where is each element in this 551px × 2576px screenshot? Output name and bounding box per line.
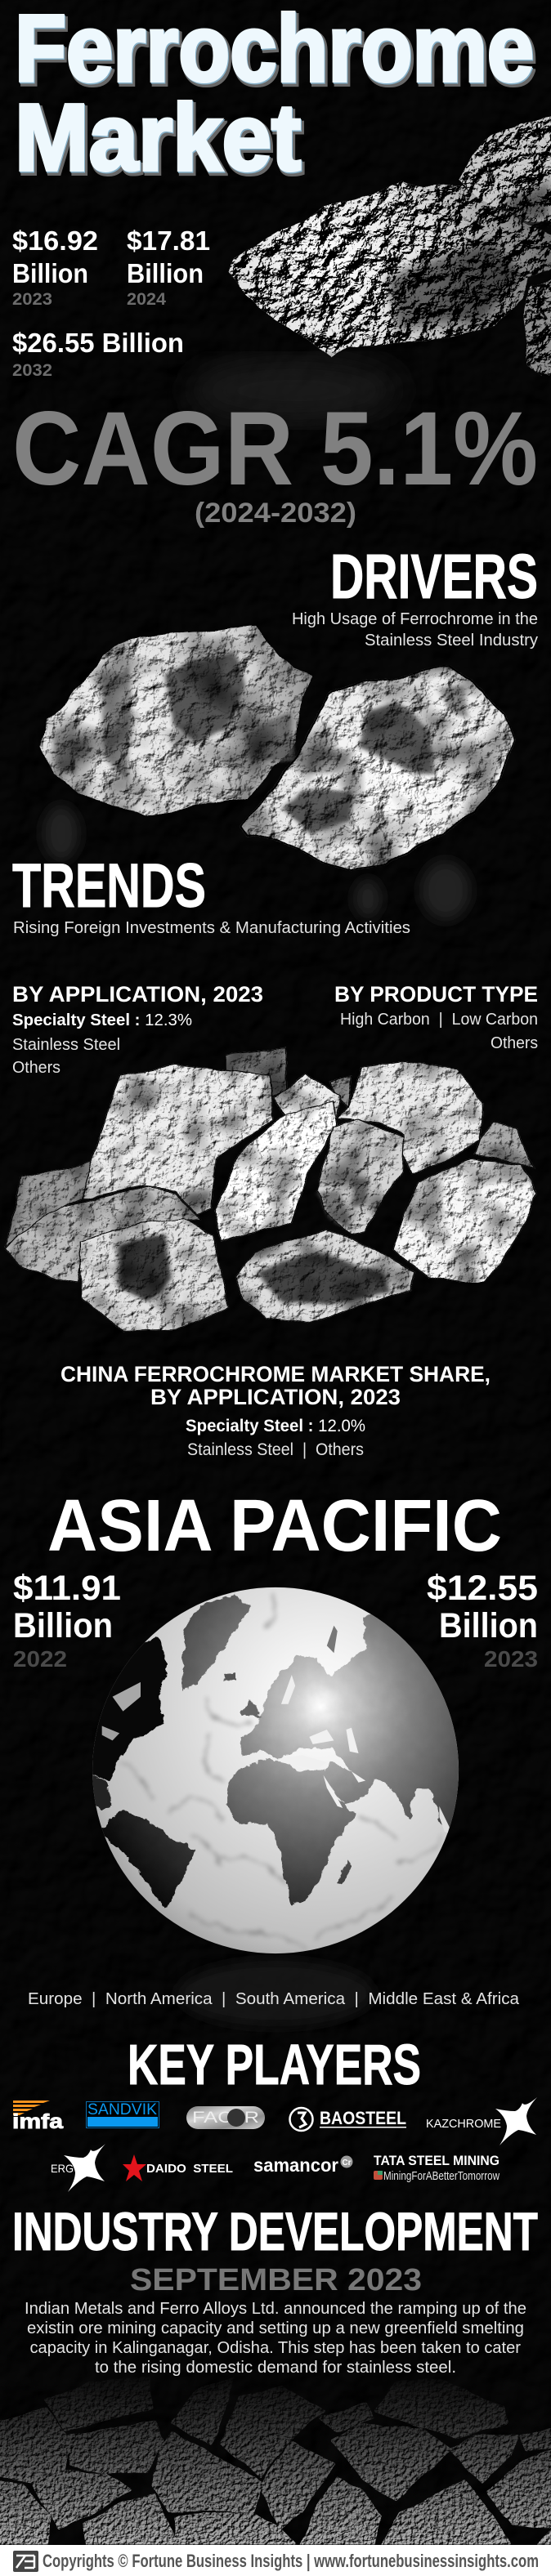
heading: ASIA PACIFIC xyxy=(47,1485,502,1567)
panel: drivers and trends xyxy=(12,542,538,937)
by product type block: BY PRODUCT TYPE xyxy=(334,982,538,1007)
logo: imfa xyxy=(12,2101,64,2133)
panel: asia pacific xyxy=(13,1485,538,2026)
logo: kazchrome: KAZCHROME xyxy=(426,2117,501,2131)
logo: samancor: samancor xyxy=(253,2154,338,2176)
logo: baosteel xyxy=(289,2108,406,2131)
by application block: Stainless Steel xyxy=(12,1036,120,1054)
title xyxy=(15,0,534,190)
stat: 2024 market size: $17.81 xyxy=(127,225,210,256)
footer xyxy=(0,2545,551,2576)
panel: header xyxy=(12,0,551,529)
silver rocks photo xyxy=(43,627,515,869)
land masses xyxy=(70,1595,478,1909)
stat: 2023 market size: $16.92 xyxy=(12,225,98,256)
stat: 2022 value: $11.91 xyxy=(13,1569,121,1608)
china share block xyxy=(60,1362,491,1459)
stat: 2032 market size: 2032 xyxy=(12,361,52,380)
stat: 2022 value: 2022 xyxy=(13,1646,67,1672)
by application block xyxy=(12,982,263,1077)
stat: 2022 value: Billion xyxy=(13,1606,113,1645)
drivers text: High Usage of Ferrochrome in the xyxy=(292,610,538,628)
metal rock photo xyxy=(228,118,551,378)
footer logo xyxy=(13,2551,38,2572)
china share block: Stainless Steel | Others xyxy=(187,1440,364,1459)
globe xyxy=(70,1587,478,1953)
trends text: Rising Foreign Investments & Manufacturing Activities xyxy=(13,919,410,937)
logo: daido steel: DAIDO STEEL xyxy=(146,2162,233,2176)
stat: 2023 market size xyxy=(12,225,98,309)
stat: 2022 value xyxy=(13,1569,121,1672)
by application block: BY APPLICATION, 2023 xyxy=(12,982,263,1007)
logo: sandvik: SANDVIK xyxy=(87,2101,157,2118)
stat: 2024 market size: Billion xyxy=(127,258,204,288)
logo: erg xyxy=(51,2144,105,2192)
stat: 2023 market size: 2023 xyxy=(12,290,52,309)
body text: to the rising domestic demand for stainless steel. xyxy=(95,2359,456,2377)
panel: industry development xyxy=(0,2201,551,2544)
regions list: Europe | North America | South America | Middle East & Africa xyxy=(28,1990,520,2008)
CAGR period: (2024-2032) xyxy=(195,498,356,529)
logo: facor xyxy=(186,2106,265,2129)
body text: Indian Metals and Ferro Alloys Ltd. announced the ramping up of the xyxy=(25,2300,526,2318)
marble veins xyxy=(119,1595,443,1944)
drivers text xyxy=(292,610,538,650)
logo: kazchrome xyxy=(426,2097,537,2145)
stat: 2024 market size xyxy=(127,225,210,309)
stat: 2023 value: $12.55 xyxy=(427,1569,538,1608)
body text: existin ore mining capacity and setting up a new greenfield smelting xyxy=(27,2319,524,2337)
panel: key players xyxy=(12,2033,537,2192)
china share block: CHINA FERROCHROME MARKET SHARE, xyxy=(60,1362,491,1386)
panel: segmentation xyxy=(5,982,538,1459)
body text: capacity in Kalinganagar, Odisha. This step has been taken to cater xyxy=(29,2339,521,2357)
trends heading: TRENDS xyxy=(12,851,206,921)
inland seas and bays xyxy=(102,1626,454,1835)
stone wall photo xyxy=(0,2377,551,2544)
title: Market xyxy=(15,84,301,190)
by product type block: Others xyxy=(491,1034,538,1052)
by product type block: High Carbon | Low Carbon xyxy=(340,1011,538,1029)
by application block: Specialty Steel : 12.3% xyxy=(12,1011,192,1029)
stat: 2032 market size: $26.55 Billion xyxy=(12,328,184,358)
by product type block xyxy=(334,982,538,1052)
rock pile photo xyxy=(5,1048,538,1330)
body text xyxy=(25,2300,526,2377)
logo: erg: ERG xyxy=(51,2162,74,2175)
logo: facor: FAC R xyxy=(192,2109,259,2127)
heading: KEY PLAYERS xyxy=(128,2033,421,2096)
logo: samancor: Cr xyxy=(342,2159,352,2168)
stat: 2023 value: Billion xyxy=(439,1606,538,1645)
stat: 2023 market size: Billion xyxy=(12,258,88,288)
china share block: BY APPLICATION, 2023 xyxy=(150,1385,401,1409)
globe reflection xyxy=(177,1961,374,2026)
reflections under rocks xyxy=(43,806,470,920)
stat: 2023 value xyxy=(427,1569,538,1672)
stat: 2032 market size xyxy=(12,328,184,380)
logo: imfa: imfa xyxy=(12,2110,64,2133)
logo: tata steel mining: TATA STEEL MINING xyxy=(374,2153,499,2168)
date: SEPTEMBER 2023 xyxy=(130,2263,422,2297)
logo: tata steel mining xyxy=(374,2153,499,2183)
logo: sandvik xyxy=(87,2101,159,2127)
by application block: Others xyxy=(12,1059,60,1077)
glow behind CAGR xyxy=(188,358,401,423)
china share block: Specialty Steel : 12.0% xyxy=(186,1417,365,1435)
stat: 2023 value: 2023 xyxy=(484,1646,538,1672)
logo: baosteel: BAOSTEEL xyxy=(320,2108,406,2128)
drivers text: Stainless Steel Industry xyxy=(365,632,538,650)
logo: tata steel mining: MiningForABetterTomorrow xyxy=(383,2169,499,2183)
stat: 2024 market size: 2024 xyxy=(127,290,166,309)
logo: daido steel xyxy=(123,2154,233,2181)
